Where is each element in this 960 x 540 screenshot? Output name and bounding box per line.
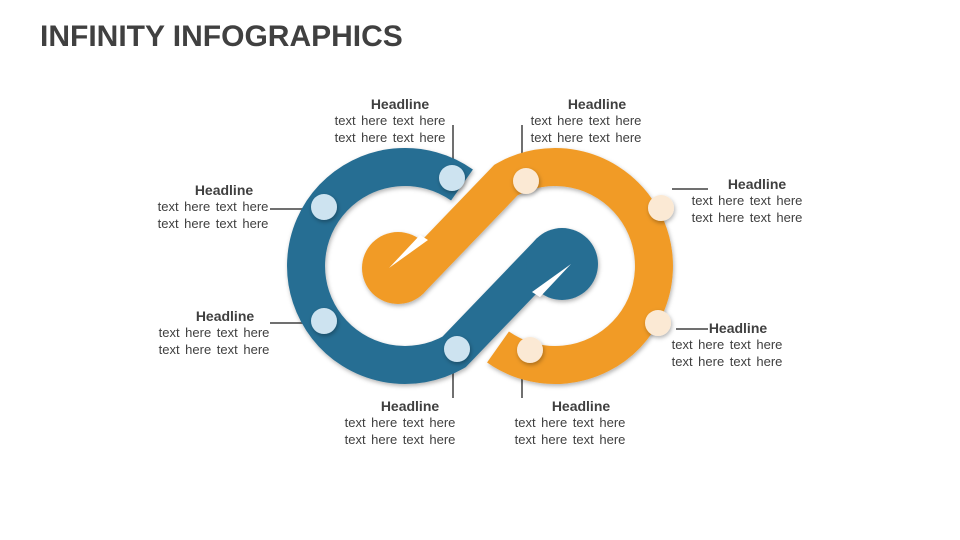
text: right upper: text here text here [692, 193, 802, 208]
infinity: orange loop [362, 167, 654, 365]
text: top-right [531, 96, 641, 145]
text: left upper [158, 182, 268, 231]
text: right upper [692, 176, 802, 225]
text: left lower [159, 308, 269, 357]
text: bottom-right: text here text here [515, 432, 625, 447]
text: top-right: text here text here [531, 113, 641, 128]
text: left upper: text here text here [158, 216, 268, 231]
text: top-left: text here text here [335, 130, 445, 145]
text: right lower: text here text here [672, 354, 782, 369]
title: INFINITY INFOGRAPHICS [40, 20, 403, 53]
text: bottom-left: Headline [381, 398, 439, 414]
text: left lower: text here text here [159, 325, 269, 340]
text: left lower: text here text here [159, 342, 269, 357]
orange dots [513, 168, 674, 363]
text: top-right: text here text here [531, 130, 641, 145]
infinity: blue loop [306, 167, 598, 365]
text: right lower: text here text here [672, 337, 782, 352]
connectors [270, 125, 708, 398]
text: right lower: Headline [709, 320, 767, 336]
text: right upper: text here text here [692, 210, 802, 225]
text: top-right: Headline [568, 96, 626, 112]
text: left upper: Headline [195, 182, 253, 198]
blue dots [311, 165, 470, 362]
text: bottom-left [345, 398, 455, 447]
text: bottom-right [515, 398, 625, 447]
text: left lower: Headline [196, 308, 254, 324]
text: top-left: text here text here [335, 113, 445, 128]
text: left upper: text here text here [158, 199, 268, 214]
text: top-left [335, 96, 445, 145]
text: right upper: Headline [728, 176, 786, 192]
text: bottom-right: Headline [552, 398, 610, 414]
text: right lower [672, 320, 782, 369]
text: bottom-left: text here text here [345, 415, 455, 430]
text: bottom-right: text here text here [515, 415, 625, 430]
text: top-left: Headline [371, 96, 429, 112]
text: bottom-left: text here text here [345, 432, 455, 447]
